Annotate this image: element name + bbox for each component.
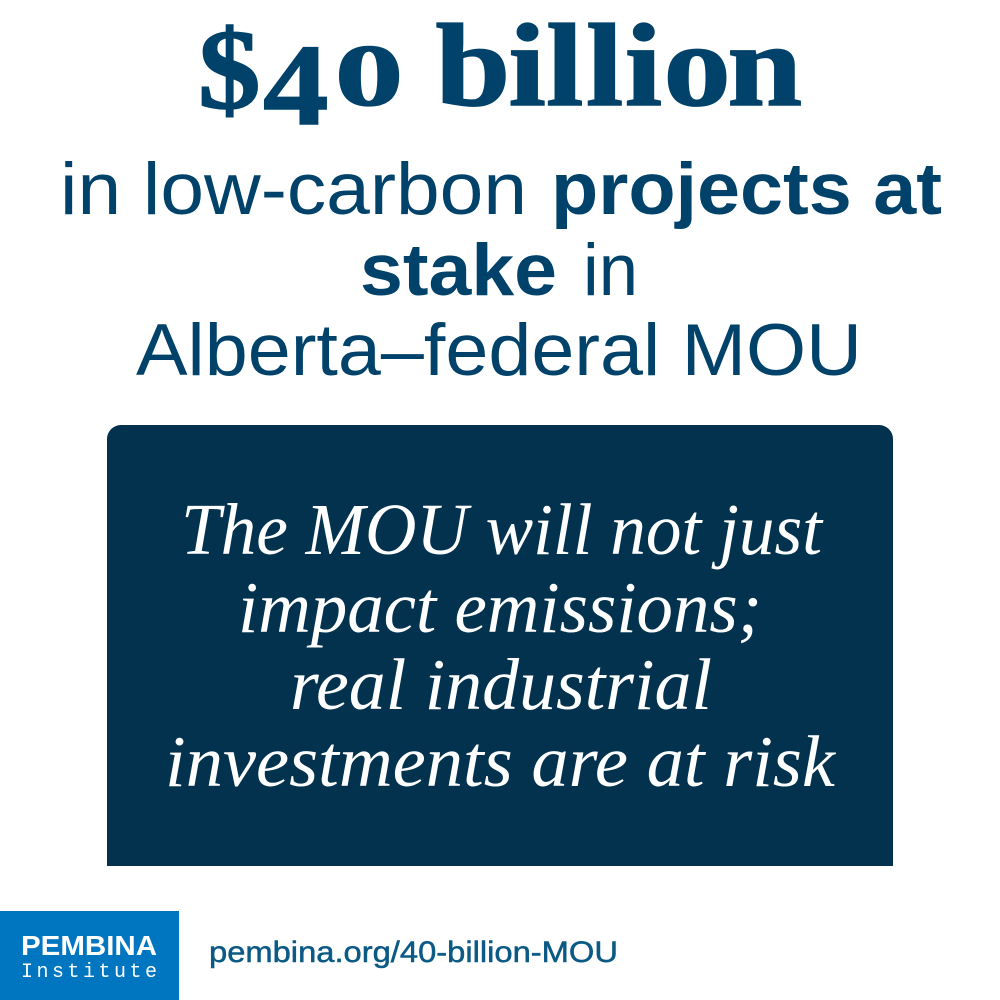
website url: pembina.org/40-billion-MOU	[209, 936, 618, 969]
subtitle text block: projects at	[551, 149, 942, 230]
subtitle text block: Alberta–federal MOU	[136, 310, 862, 391]
subtitle text block: in low-carbon	[60, 149, 527, 230]
panel: quote	[107, 425, 893, 866]
subtitle text block: in	[583, 230, 638, 311]
title: $40 billion: 0	[335, 27, 403, 124]
subtitle text block	[60, 149, 942, 391]
quote text	[165, 489, 837, 802]
quote text: investments are at risk	[165, 721, 837, 802]
title: $40 billion: $	[198, 6, 261, 133]
title: $40 billion	[198, 1, 802, 149]
title: $40 billion: billion	[435, 1, 802, 131]
quote text: The MOU will not just	[181, 489, 824, 570]
logo: Pembina Institute	[0, 911, 179, 1000]
subtitle text block: stake	[360, 230, 557, 311]
quote text: impact emissions;	[238, 567, 762, 648]
logo: Pembina Institute: Institute	[21, 961, 157, 984]
quote text: real industrial	[290, 644, 712, 725]
title: $40 billion: 4	[263, 21, 329, 149]
logo: Pembina Institute: PEMBINA	[21, 930, 157, 961]
